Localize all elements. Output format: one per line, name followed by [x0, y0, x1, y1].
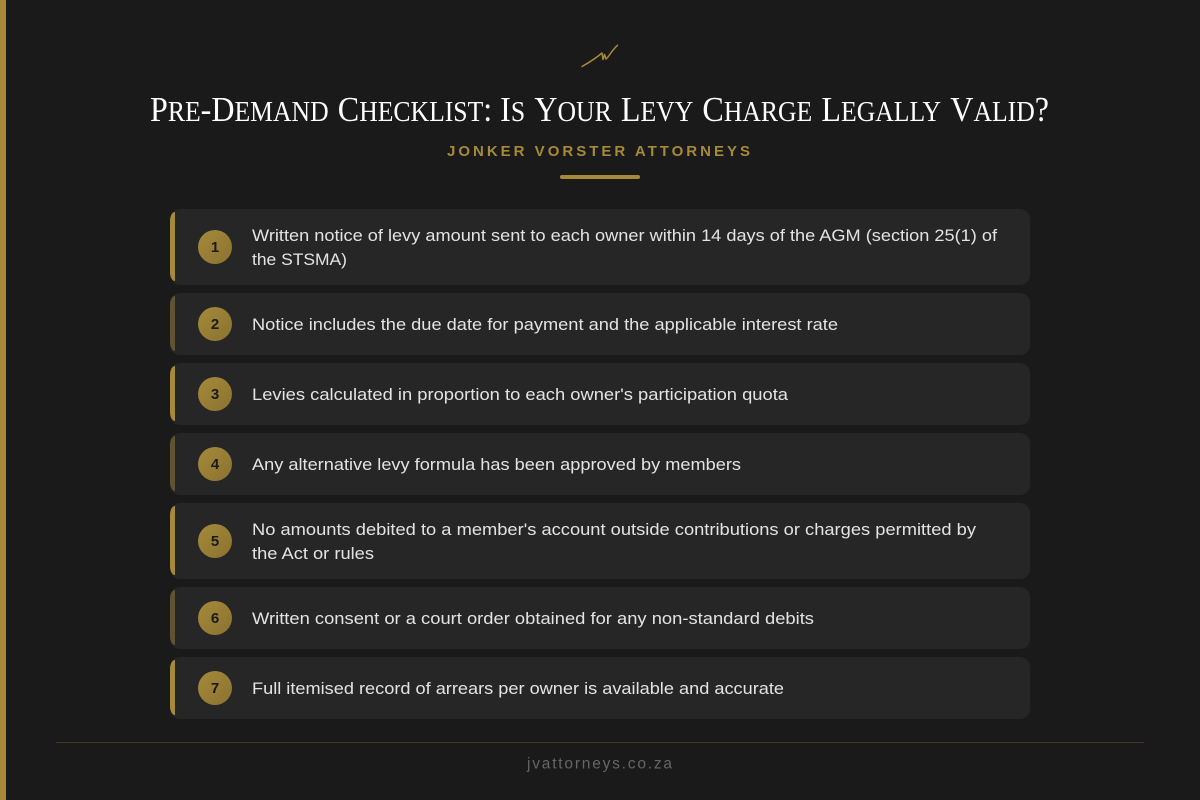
item 2 text: Notice includes the due date for payment and the applicable interest rate: [252, 316, 838, 334]
checklist item 1: [170, 209, 1030, 285]
checklist item 5: [170, 503, 1030, 579]
footer website: jvattorneys.co.za: [526, 756, 672, 772]
number badge 5: 5: [211, 533, 219, 550]
number badge 1: 1: [211, 239, 219, 256]
left accent bar: [0, 0, 6, 800]
number badge 7: [198, 671, 232, 705]
footer divider: [56, 742, 1144, 743]
item 5 text: [252, 521, 977, 563]
number badge 2: 2: [211, 316, 219, 333]
number badge 2: [198, 307, 232, 341]
subtitle: JONKER VORSTER ATTORNEYS: [447, 143, 750, 160]
item 5 text: the Act or rules: [252, 545, 374, 563]
item 6 text: Written consent or a court order obtained for any non-standard debits: [252, 610, 814, 628]
checklist item 7: [170, 657, 1030, 719]
number badge 3: 3: [211, 386, 219, 403]
number badge 6: [198, 601, 232, 635]
item 1 text: Written notice of levy amount sent to each owner within 14 days of the AGM (section 25(1) of: [252, 227, 997, 245]
number badge 3: [198, 377, 232, 411]
number badge 4: [198, 447, 232, 481]
number badge 1: [198, 230, 232, 264]
item 1 text: [252, 227, 998, 269]
number badge 4: 4: [211, 456, 219, 473]
item 7 text: Full itemised record of arrears per owner is available and accurate: [252, 680, 784, 698]
number badge 6: 6: [211, 610, 219, 627]
item 5 text: No amounts debited to a member's account outside contributions or charges permitted by: [252, 521, 977, 539]
checklist item 6: [170, 587, 1030, 649]
title: Pre-Demand Checklist: Is Your Levy Charge Legally Valid?: [150, 85, 1049, 130]
number badge 5: [198, 524, 232, 558]
item 3 text: Levies calculated in proportion to each owner's participation quota: [252, 386, 789, 404]
icon: signature logo: [581, 44, 618, 68]
checklist item 4: [170, 433, 1030, 495]
title underline: [560, 175, 640, 179]
item 4 text: Any alternative levy formula has been approved by members: [252, 456, 741, 474]
item 1 text: the STSMA): [252, 251, 347, 269]
checklist item 2: [170, 293, 1030, 355]
checklist item 3: [170, 363, 1030, 425]
number badge 7: 7: [211, 680, 219, 697]
